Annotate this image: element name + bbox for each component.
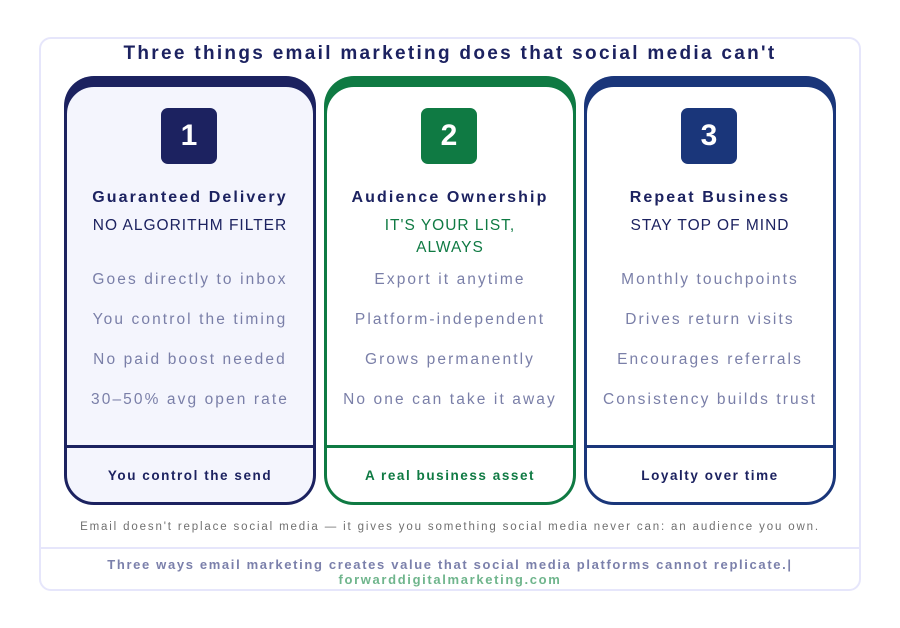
title: Three things email marketing does that social media can't <box>124 43 776 64</box>
panel: audience ownership <box>324 84 576 505</box>
heading: Repeat Business <box>630 189 790 206</box>
panel: audience ownership: Platform-independent <box>355 311 545 328</box>
icon: badge 2 <box>421 108 477 164</box>
panel: guaranteed delivery: 30–50% avg open rate <box>91 391 289 408</box>
subtitle: NO ALGORITHM FILTER <box>93 217 287 234</box>
panel: guaranteed delivery: You control the timing <box>93 311 287 328</box>
panel: guaranteed delivery: No paid boost needed <box>93 351 287 368</box>
subtitle <box>385 217 515 256</box>
icon: badge 1: 1 <box>181 119 197 152</box>
icon: badge 3: 3 <box>701 119 717 152</box>
panel: repeat business: Drives return visits <box>625 311 795 328</box>
icon: badge 1 <box>161 108 217 164</box>
panel: guaranteed delivery <box>64 84 316 505</box>
panel: repeat business: Encourages referrals <box>617 351 803 368</box>
heading: Audience Ownership <box>352 189 548 206</box>
panel: audience ownership: No one can take it away <box>343 391 557 408</box>
panel: audience ownership: Grows permanently <box>365 351 535 368</box>
icon: badge 2: 2 <box>441 119 457 152</box>
panel: repeat business <box>584 84 836 505</box>
footer caption: forwarddigitalmarketing.com <box>338 572 561 587</box>
subtitle: IT'S YOUR LIST, <box>385 217 515 234</box>
footer caption <box>107 557 793 587</box>
subtitle: ALWAYS <box>416 239 484 256</box>
panel: repeat business: Consistency builds trust <box>603 391 817 408</box>
bullets: Export it anytime <box>374 271 526 288</box>
footer text: Loyalty over time <box>641 468 779 483</box>
footer caption: Three ways email marketing creates value that social media platforms cannot replicate.| <box>107 557 793 572</box>
icon: badge 3 <box>681 108 737 164</box>
footer text: A real business asset <box>365 468 535 483</box>
bullets: Goes directly to inbox <box>92 271 288 288</box>
heading: Guaranteed Delivery <box>92 189 288 206</box>
subtitle: STAY TOP OF MIND <box>630 217 789 234</box>
note: Email doesn't replace social media — it gives you something social media never can: an audience you own. <box>80 521 820 533</box>
footer text: You control the send <box>108 468 272 483</box>
bullets: Monthly touchpoints <box>621 271 799 288</box>
